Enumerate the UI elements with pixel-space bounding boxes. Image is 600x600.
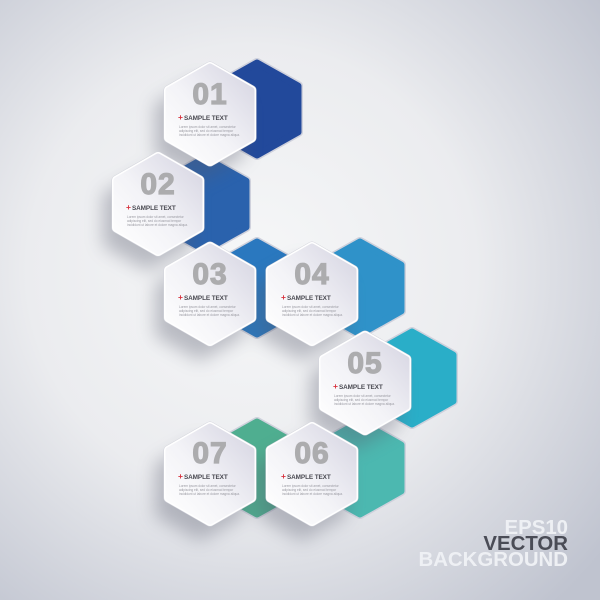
EPS10 vector background label: BACKGROUND — [418, 549, 568, 571]
description: incididunt ut labore et dolore magna aliqua. — [179, 133, 240, 137]
label — [126, 202, 176, 212]
description: incididunt ut labore et dolore magna aliqua. — [127, 223, 188, 227]
description — [334, 394, 395, 406]
number 02: 02 — [140, 168, 176, 201]
colored hexagons — [164, 63, 453, 514]
step 01 — [169, 67, 251, 161]
description — [179, 305, 240, 317]
step 07 — [169, 427, 251, 521]
description: Lorem ipsum dolor sit amet, consectetur — [179, 484, 237, 488]
step 06 — [271, 427, 353, 521]
number 01: 01 — [192, 78, 228, 111]
description: adipiscing elit, sed do eiusmod tempor — [127, 219, 182, 223]
label: + — [178, 112, 183, 122]
step 03 — [169, 247, 251, 341]
label: SAMPLE TEXT — [184, 474, 228, 481]
label: + — [178, 292, 183, 302]
label — [333, 381, 383, 391]
label: + — [333, 381, 338, 391]
step 04 — [271, 247, 353, 341]
hexagon shadows — [103, 79, 400, 541]
step 02 — [117, 157, 199, 251]
description: Lorem ipsum dolor sit amet, consectetur — [282, 305, 340, 309]
number 04: 04 — [294, 258, 330, 291]
label: + — [281, 471, 286, 481]
description: Lorem ipsum dolor sit amet, consectetur — [282, 484, 340, 488]
description: adipiscing elit, sed do eiusmod tempor — [179, 129, 234, 133]
number 03: 03 — [192, 258, 228, 291]
number 05: 05 — [347, 347, 383, 380]
label — [178, 292, 228, 302]
description: adipiscing elit, sed do eiusmod tempor — [282, 488, 337, 492]
label: SAMPLE TEXT — [184, 295, 228, 302]
label: + — [126, 202, 131, 212]
label: SAMPLE TEXT — [132, 205, 176, 212]
description — [179, 484, 240, 496]
label: SAMPLE TEXT — [339, 384, 383, 391]
description: Lorem ipsum dolor sit amet, consectetur — [334, 394, 392, 398]
label — [281, 471, 331, 481]
description — [282, 305, 343, 317]
description: incididunt ut labore et dolore magna aliqua. — [334, 402, 395, 406]
description — [127, 215, 188, 227]
description — [179, 125, 240, 137]
description: incididunt ut labore et dolore magna aliqua. — [282, 492, 343, 496]
description: Lorem ipsum dolor sit amet, consectetur — [127, 215, 185, 219]
description: adipiscing elit, sed do eiusmod tempor — [282, 309, 337, 313]
EPS10 vector background label — [418, 517, 568, 571]
label: SAMPLE TEXT — [287, 474, 331, 481]
label — [281, 292, 331, 302]
EPS10 vector background label: EPS10 — [505, 517, 568, 539]
label: + — [281, 292, 286, 302]
description — [282, 484, 343, 496]
description: incididunt ut labore et dolore magna aliqua. — [282, 313, 343, 317]
label: SAMPLE TEXT — [184, 115, 228, 122]
label: + — [178, 471, 183, 481]
EPS10 vector background label: VECTOR — [483, 533, 568, 555]
step 05 — [324, 336, 406, 430]
description: incididunt ut labore et dolore magna aliqua. — [179, 313, 240, 317]
description: adipiscing elit, sed do eiusmod tempor — [179, 309, 234, 313]
description: adipiscing elit, sed do eiusmod tempor — [334, 398, 389, 402]
description: adipiscing elit, sed do eiusmod tempor — [179, 488, 234, 492]
description: Lorem ipsum dolor sit amet, consectetur — [179, 305, 237, 309]
label: SAMPLE TEXT — [287, 295, 331, 302]
number 07: 07 — [192, 437, 228, 470]
label — [178, 471, 228, 481]
description: Lorem ipsum dolor sit amet, consectetur — [179, 125, 237, 129]
number 06: 06 — [294, 437, 330, 470]
label — [178, 112, 228, 122]
description: incididunt ut labore et dolore magna aliqua. — [179, 492, 240, 496]
